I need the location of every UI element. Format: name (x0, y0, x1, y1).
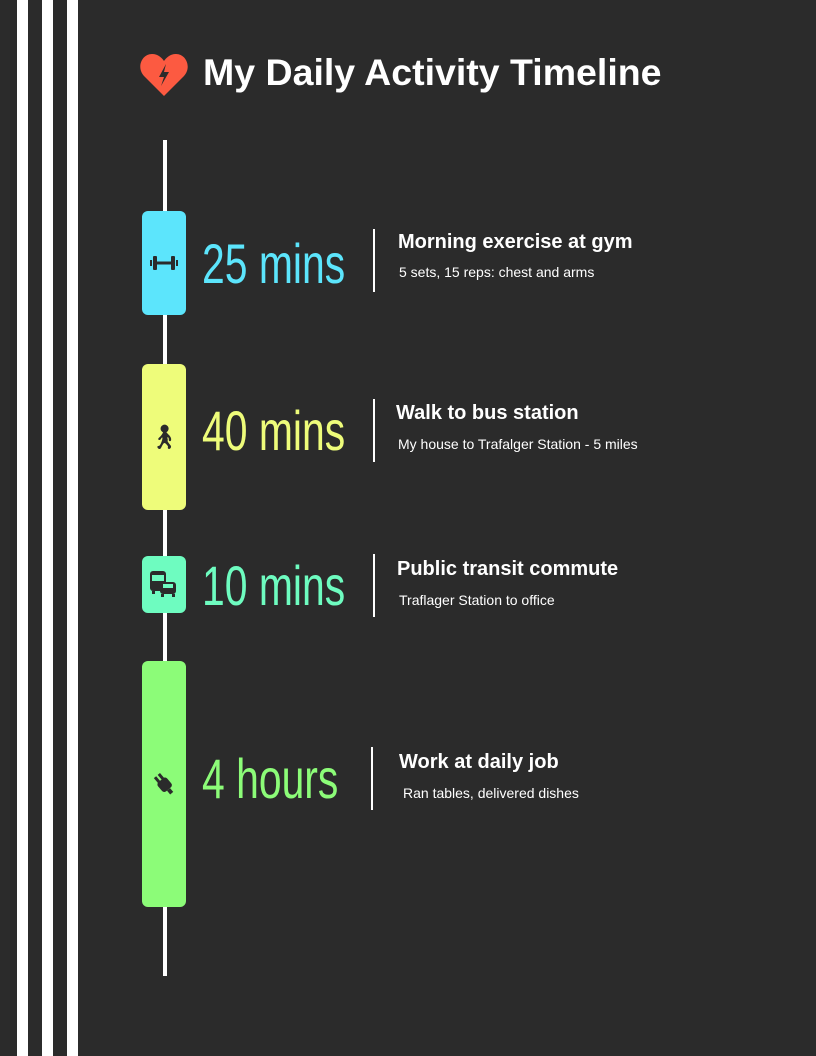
entry 4 (142, 661, 579, 907)
description: Public transit commute (397, 558, 618, 580)
duration: 25 mins (202, 232, 345, 295)
title: My Daily Activity Timeline (203, 51, 662, 93)
description: Work at daily job (399, 751, 559, 773)
description: Morning exercise at gym (398, 231, 633, 253)
entry 3 (142, 554, 618, 617)
icon: heart (140, 54, 188, 96)
entry 2 (142, 364, 638, 510)
duration: 40 mins (202, 399, 345, 462)
duration: 4 hours (202, 747, 338, 810)
icon box: dumbbell (142, 211, 186, 315)
icon box: walking (142, 364, 186, 510)
timeline line (163, 140, 167, 976)
icon box: walking: 🚶︎ (149, 424, 179, 450)
entry 4: Ran tables, delivered dishes (403, 785, 579, 801)
icon box: plug (142, 661, 186, 907)
description: Walk to bus station (396, 402, 579, 424)
entry 1 (142, 211, 633, 315)
entry 1: 5 sets, 15 reps: chest and arms (399, 264, 594, 280)
duration: 10 mins (202, 554, 345, 617)
icon box: transit (142, 556, 186, 613)
entry 3: Traflager Station to office (399, 592, 555, 608)
entry 2: My house to Trafalger Station - 5 miles (398, 436, 638, 452)
